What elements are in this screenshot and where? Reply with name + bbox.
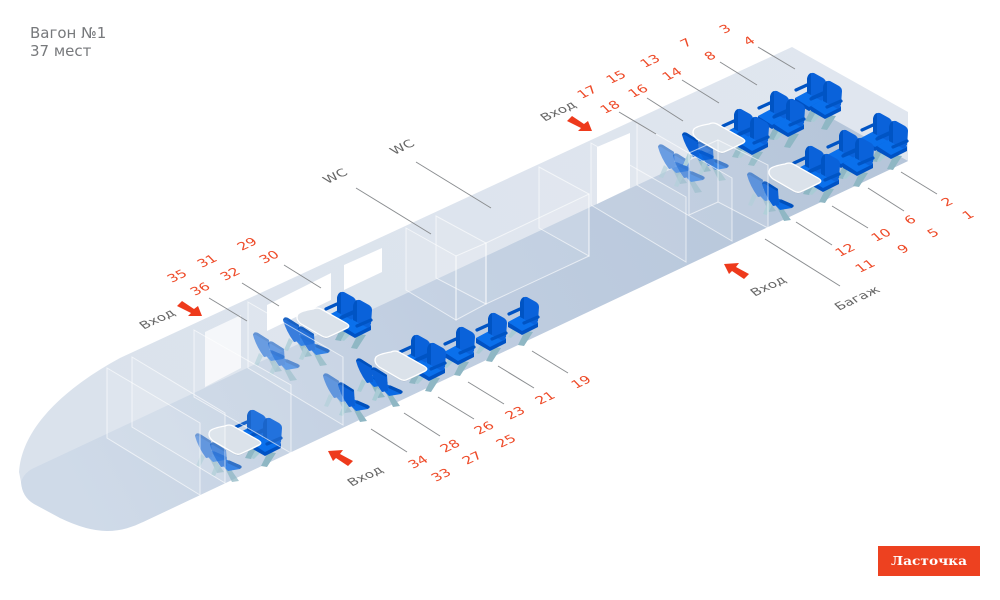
glass partitions [107, 123, 768, 495]
brand badge [878, 546, 980, 576]
tables [209, 123, 821, 455]
seats: left section [195, 292, 372, 482]
seat numbers: middle: 23 [502, 404, 529, 423]
seat numbers: lower right: 10 [868, 226, 895, 245]
grey labels: entrances, WC, luggage: Вход [345, 464, 387, 489]
seat numbers: middle: 19 [568, 373, 595, 392]
grey labels: entrances, WC, luggage [137, 99, 884, 489]
brand badge: Ласточка [891, 554, 967, 568]
seat numbers: upper left: 36 [187, 280, 214, 299]
grey labels: entrances, WC, luggage: Вход [137, 307, 179, 332]
seat numbers: middle: 33 [428, 466, 455, 485]
WC compartments [406, 167, 589, 320]
seat numbers: upper right: 14 [659, 65, 686, 84]
seats: forward row, upper right [722, 73, 842, 166]
seat numbers: lower right: 1 [959, 208, 978, 223]
seat numbers: lower right: 9 [894, 242, 913, 257]
seat numbers: lower right: 2 [938, 195, 957, 210]
seat numbers: middle: 27 [459, 449, 486, 468]
seats: rear-facing, right section [658, 132, 792, 221]
seat numbers: upper right: 15 [603, 68, 630, 87]
title: wagon number: Вагон №1 [30, 24, 106, 42]
seat numbers: upper right: 4 [740, 34, 759, 49]
seat numbers: lower right: 6 [901, 213, 920, 228]
seat numbers: upper left: 30 [256, 248, 283, 267]
seat numbers: middle: 25 [493, 432, 520, 451]
seats: forward row, lower right [793, 113, 908, 203]
seat numbers: middle: 21 [532, 389, 559, 408]
title: wagon number: 37 мест [30, 42, 92, 60]
seat numbers: lower right [832, 195, 978, 276]
entrance arrows [177, 116, 749, 466]
seat numbers: upper left [164, 235, 283, 299]
seat numbers: upper right: 7 [677, 36, 696, 51]
door openings and windows [205, 133, 630, 387]
seats: middle section [323, 297, 539, 422]
seat numbers: middle [405, 373, 595, 485]
seat numbers: middle: 26 [471, 419, 498, 438]
seat numbers: upper left: 35 [164, 267, 191, 286]
seat numbers: lower right: 12 [832, 241, 859, 260]
seat numbers: lower right: 5 [924, 226, 943, 241]
seat numbers: lower right: 11 [852, 257, 879, 276]
grey labels: entrances, WC, luggage: WC [387, 138, 418, 158]
seat numbers: upper right: 8 [701, 49, 720, 64]
seat numbers: upper left: 32 [217, 265, 244, 284]
leader lines [209, 47, 937, 452]
grey labels: entrances, WC, luggage: Вход [538, 99, 580, 124]
grey labels: entrances, WC, luggage: Багаж [832, 284, 884, 313]
seat numbers: upper right: 18 [597, 98, 624, 117]
seat numbers: upper left: 29 [234, 235, 261, 254]
grey labels: entrances, WC, luggage: WC [320, 167, 351, 187]
seat numbers: middle: 28 [437, 437, 464, 456]
back wall [19, 47, 908, 531]
seat numbers: upper right: 17 [574, 83, 601, 102]
seat numbers: upper right: 13 [637, 52, 664, 71]
title: wagon number [30, 24, 106, 60]
seat numbers: upper right: 3 [716, 22, 735, 37]
seat numbers: upper right: 16 [625, 82, 652, 101]
seat numbers: upper right [574, 22, 759, 117]
car hull [19, 47, 908, 531]
seat numbers: middle: 34 [405, 453, 432, 472]
seat numbers: upper left: 31 [194, 252, 221, 271]
grey labels: entrances, WC, luggage: Вход [748, 274, 790, 299]
floor [21, 105, 908, 531]
